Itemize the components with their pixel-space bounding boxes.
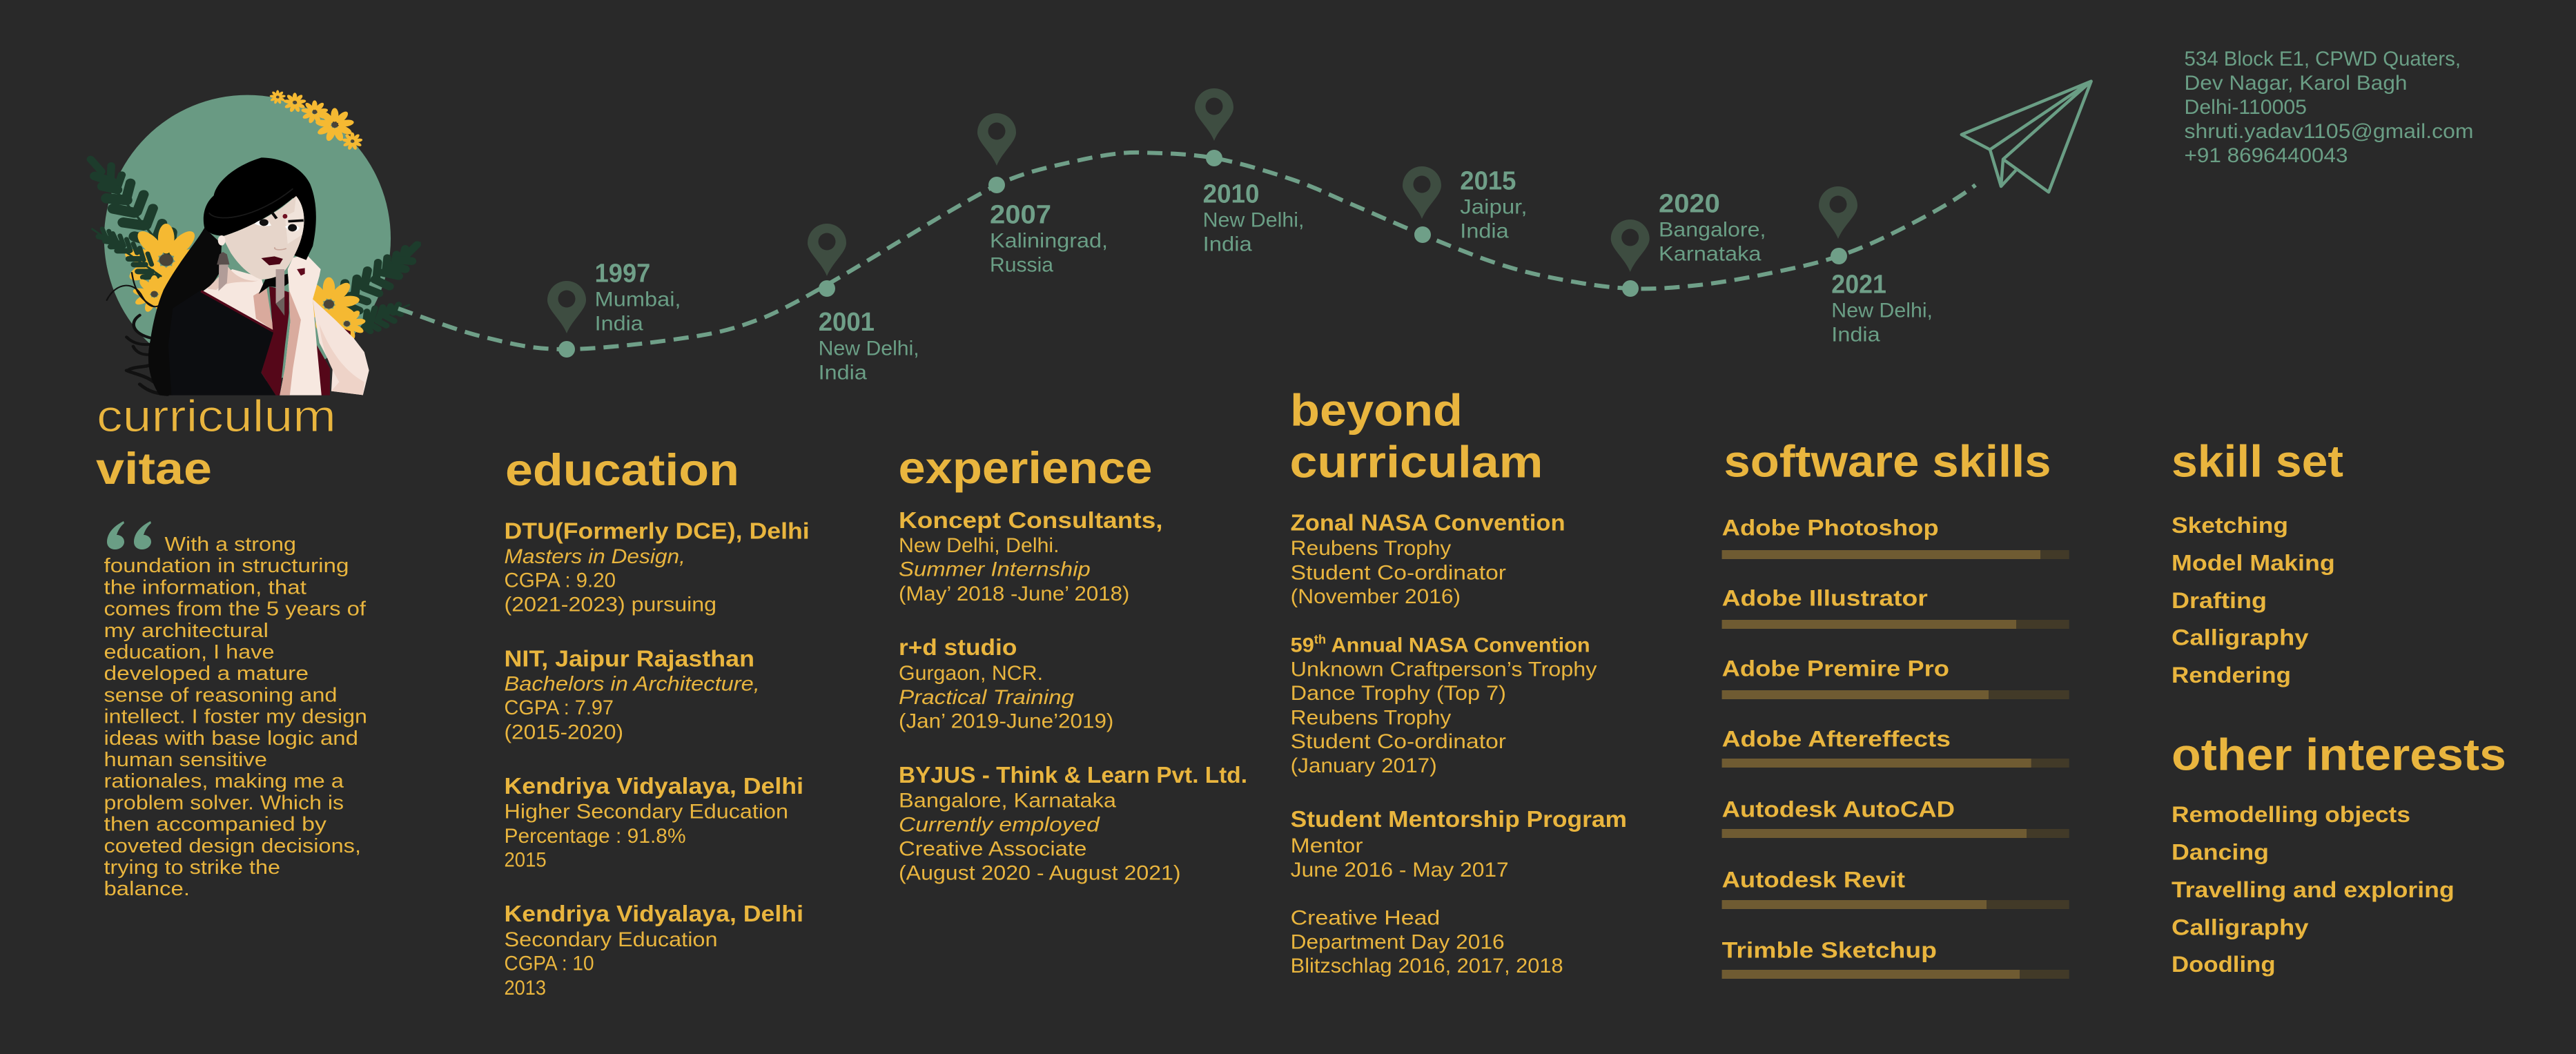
timeline stop 1997: 1997 — [595, 259, 650, 288]
entry: 59th Annual NASA Convention: Annual NASA Convention — [1326, 634, 1590, 656]
contact details: 534 Block E1, CPWD Quaters, — [2184, 48, 2461, 70]
timeline stop 2010: New Delhi, — [1203, 208, 1305, 231]
timeline stop 2001: 2001 — [819, 308, 875, 337]
entry: Zonal NASA Convention — [1291, 509, 1565, 608]
entry: Zonal NASA Convention: Reubens Trophy — [1291, 537, 1452, 560]
title: vitae — [96, 443, 212, 494]
contact details: Dev Nagar, Karol Bagh — [2184, 72, 2408, 95]
contact details: Delhi-110005 — [2184, 96, 2307, 119]
face highlight — [285, 196, 304, 244]
skill: Trimble Sketchup — [1722, 938, 2069, 979]
timeline stop 2021: New Delhi, — [1831, 299, 1933, 322]
entry: Kendriya Vidyalaya secondary — [504, 901, 803, 999]
entry: Student Mentorship Program: Student Mentorship Program — [1291, 806, 1627, 832]
long hair — [148, 228, 222, 396]
entry: 59th Annual NASA Convention: Unknown Craftperson’s Trophy — [1291, 658, 1597, 681]
skill list: Drafting — [2172, 588, 2267, 613]
profile statement: developed a mature — [104, 663, 309, 685]
profile statement: comes from the 5 years of — [104, 598, 367, 621]
profile statement: With a strong — [164, 534, 296, 556]
eyes — [255, 219, 300, 231]
entry: NIT — [504, 646, 760, 744]
entry: r+d studio: r+d studio — [899, 634, 1017, 660]
timeline stop 2020: Bangalore, — [1659, 218, 1766, 241]
timeline stop 2001 — [808, 224, 919, 384]
entry: DTU: Masters in Design, — [504, 545, 685, 568]
entry: BYJUS: (August 2020 - August 2021) — [899, 862, 1181, 885]
entry: Kendriya Vidyalaya higher secondary — [504, 773, 803, 871]
contact details: +91 8696440043 — [2184, 144, 2348, 167]
profile statement: trying to strike the — [104, 857, 280, 879]
entry: 59th Annual NASA Convention: (January 2017) — [1291, 754, 1437, 777]
entry: r+d studio: Practical Training — [899, 686, 1075, 709]
timeline stop 2015: Jaipur, — [1460, 195, 1527, 218]
heading: other interests: other interests — [2172, 730, 2506, 780]
skill list: Calligraphy — [2172, 625, 2309, 650]
heading: skill set: skill set — [2172, 436, 2343, 486]
hair top — [204, 157, 316, 260]
skill: Autodesk Revit — [1722, 868, 2069, 909]
neck shading — [207, 267, 259, 290]
entry: Zonal NASA Convention: Zonal NASA Convention — [1291, 509, 1565, 535]
entry: 59th Annual NASA Convention: 59 — [1291, 634, 1314, 656]
profile statement: education, I have — [104, 641, 275, 663]
entry: DTU: CGPA : 9.20 — [504, 569, 616, 592]
profile statement: problem solver. Which is — [104, 792, 344, 814]
entry: Koncept Consultants: New Delhi, Delhi. — [899, 534, 1060, 557]
panel: other interests — [2172, 730, 2506, 977]
right leaf branches — [343, 243, 420, 331]
entry: Kendriya Vidyalaya secondary: Secondary Education — [504, 928, 718, 951]
entry: BYJUS: Creative Associate — [899, 838, 1086, 860]
entry: Koncept Consultants: Summer Internship — [899, 558, 1091, 581]
hair curls — [107, 273, 168, 395]
skill: Autodesk Revit: Autodesk Revit — [1722, 868, 1905, 892]
timeline stop 2021: India — [1831, 323, 1880, 346]
entry: DTU: (2021-2023) pursuing — [504, 594, 716, 616]
profile statement — [104, 534, 367, 900]
entry: 59th Annual NASA Convention: Dance Trophy (Top 7) — [1291, 682, 1506, 705]
entry: Koncept Consultants — [899, 507, 1163, 605]
forearm shading — [280, 290, 301, 396]
heading: education: education — [505, 445, 739, 495]
timeline stop 2010 — [1195, 88, 1305, 255]
skill: Adobe Premire Pro: Adobe Premire Pro — [1722, 656, 1949, 681]
skill: Adobe Aftereffects: Adobe Aftereffects — [1722, 727, 1951, 752]
timeline stop 2015 — [1403, 166, 1527, 243]
entry: NIT: (2015-2020) — [504, 721, 623, 744]
entry: Creative Head: Creative Head — [1291, 906, 1440, 929]
entry: 59th Annual NASA Convention: th — [1314, 632, 1326, 646]
sari lower — [315, 328, 351, 396]
bindi — [283, 214, 287, 219]
entry: Koncept Consultants: (May’ 2018 -June’ 2018) — [899, 583, 1129, 605]
big left flower — [124, 224, 208, 297]
skill list — [2172, 513, 2335, 687]
skill: Adobe Aftereffects — [1722, 727, 2069, 768]
skill: Adobe Illustrator — [1722, 586, 2069, 629]
entry: DTU: DTU(Formerly DCE), Delhi — [504, 518, 810, 544]
timeline stop 2007 — [977, 113, 1108, 276]
panel: experience — [899, 442, 1247, 885]
entry: r+d studio — [899, 634, 1113, 733]
icon: paper plane — [1962, 81, 2091, 192]
timeline stop 1997 — [547, 259, 681, 358]
heading: beyond curriculam — [1289, 384, 1543, 487]
flower arc top right — [269, 90, 363, 150]
interests list: Dancing — [2172, 840, 2269, 865]
timeline stop 2007: Kaliningrad, — [990, 229, 1108, 252]
timeline stop 2020: Karnataka — [1659, 242, 1762, 265]
eyebrows — [272, 212, 304, 222]
skill list: Rendering — [2172, 663, 2291, 687]
entry: r+d studio: (Jan’ 2019-June’2019) — [899, 710, 1113, 733]
entry: BYJUS: Currently employed — [899, 813, 1101, 836]
right earring — [276, 269, 284, 315]
skill list: Model Making — [2172, 551, 2335, 576]
interests list: Remodelling objects — [2172, 802, 2410, 827]
contact details — [2184, 48, 2474, 167]
entry: BYJUS: BYJUS - Think & Learn Pvt. Ltd. — [899, 762, 1247, 788]
profile statement: human sensitive — [104, 749, 267, 771]
skill: Adobe Photoshop — [1722, 515, 2069, 559]
timeline stop 2021 — [1819, 186, 1933, 346]
entry: DTU — [504, 518, 810, 616]
entry: Zonal NASA Convention: (November 2016) — [1291, 585, 1461, 608]
entry: NIT: NIT, Jaipur Rajasthan — [504, 646, 754, 671]
entry: Kendriya Vidyalaya secondary: 2013 — [504, 977, 546, 999]
entry: Kendriya Vidyalaya higher secondary: Kendriya Vidyalaya, Delhi — [504, 773, 803, 799]
timeline stop 1997: Mumbai, — [595, 288, 681, 311]
interests list: Doodling — [2172, 952, 2276, 977]
timeline stop 2021: 2021 — [1831, 270, 1886, 299]
entry: BYJUS: Bangalore, Karnataka — [899, 790, 1117, 812]
timeline stop 2010: 2010 — [1203, 179, 1259, 208]
title — [96, 391, 336, 494]
title: curriculum — [97, 391, 336, 441]
interests list: Travelling and exploring — [2172, 877, 2455, 902]
nail — [297, 268, 305, 275]
profile statement: my architectural — [104, 620, 269, 642]
nose — [275, 247, 286, 250]
contact details: shruti.yadav1105@gmail.com — [2184, 120, 2474, 143]
panel: skill set — [2172, 436, 2343, 687]
dashed timeline path — [398, 153, 1975, 349]
skill: Autodesk AutoCAD — [1722, 797, 2069, 838]
sari drape — [262, 286, 289, 396]
entry: Kendriya Vidyalaya higher secondary: Percentage : 91.8% — [504, 825, 686, 848]
entry: Koncept Consultants: Koncept Consultants, — [899, 507, 1163, 533]
entry: Creative Head — [1291, 906, 1563, 977]
timeline stop 1997: India — [595, 312, 643, 335]
skill: Adobe Premire Pro — [1722, 656, 2069, 699]
timeline stop 2015: India — [1460, 219, 1509, 242]
small left flower — [133, 275, 176, 313]
profile statement: rationales, making me a — [104, 770, 344, 792]
skill: Trimble Sketchup: Trimble Sketchup — [1722, 938, 1937, 963]
entry: Kendriya Vidyalaya secondary: CGPA : 10 — [504, 953, 594, 975]
profile statement: the information, that — [104, 576, 306, 598]
interests list — [2172, 802, 2455, 977]
green circle — [104, 95, 391, 382]
interests list: Calligraphy — [2172, 915, 2309, 939]
skill: Adobe Illustrator: Adobe Illustrator — [1722, 586, 1928, 611]
entry: 59th Annual NASA Convention — [1291, 632, 1597, 777]
timeline stop 2020: 2020 — [1659, 189, 1720, 218]
entry: Student Mentorship Program — [1291, 806, 1627, 881]
entry: Creative Head: Department Day 2016 — [1291, 930, 1505, 954]
front forearm and hand — [280, 254, 322, 396]
entry: Kendriya Vidyalaya higher secondary: 2015 — [504, 848, 547, 871]
panel: beyond curriculam — [1289, 384, 1627, 977]
timeline stop 2010: India — [1203, 233, 1252, 255]
entry: Kendriya Vidyalaya secondary: Kendriya Vidyalaya, Delhi — [504, 901, 803, 926]
lips — [262, 256, 283, 265]
profile statement: foundation in structuring — [104, 555, 349, 577]
entry: Creative Head: Blitzschlag 2016, 2017, 2018 — [1291, 955, 1563, 977]
profile statement: coveted design decisions, — [104, 835, 361, 857]
profile statement: balance. — [104, 878, 190, 900]
heading: experience: experience — [899, 442, 1153, 493]
timeline stop 2001: India — [819, 361, 867, 384]
timeline stop 2007: 2007 — [990, 200, 1051, 229]
back forearm — [313, 299, 369, 395]
face — [222, 196, 304, 280]
left earring — [217, 252, 230, 291]
timeline stop 2001: New Delhi, — [819, 337, 919, 360]
panel: software skills — [1722, 436, 2069, 979]
entry: Student Mentorship Program: Mentor — [1291, 835, 1363, 857]
entry: NIT: Bachelors in Architecture, — [504, 673, 760, 696]
skill: Adobe Photoshop: Adobe Photoshop — [1722, 515, 1939, 540]
blouse — [168, 291, 276, 396]
panel: education — [504, 445, 810, 999]
entry: Student Mentorship Program: June 2016 - May 2017 — [1291, 859, 1509, 881]
heading: beyond curriculam: beyond — [1290, 384, 1463, 435]
profile statement: then accompanied by — [104, 814, 327, 836]
timeline stop 2007: Russia — [990, 253, 1053, 276]
icon: quote marks — [107, 521, 151, 549]
neckline trim — [201, 291, 273, 331]
timeline stop 2015: 2015 — [1460, 166, 1516, 195]
portrait illustration — [90, 90, 420, 396]
back forearm shading — [320, 324, 364, 395]
entry: Zonal NASA Convention: Student Co-ordinator — [1291, 561, 1506, 584]
profile statement: intellect. I foster my design — [104, 706, 367, 728]
heading: beyond curriculam: curriculam — [1289, 436, 1543, 487]
entry: 59th Annual NASA Convention: Student Co-ordinator — [1291, 730, 1506, 753]
entry: NIT: CGPA : 7.97 — [504, 696, 614, 719]
timeline stop 2020 — [1611, 189, 1766, 297]
lower-left leaf branch — [92, 228, 161, 277]
entry: 59th Annual NASA Convention: Reubens Trophy — [1291, 706, 1452, 729]
neck shadow — [253, 288, 273, 330]
hair strand — [209, 188, 293, 218]
profile statement: sense of reasoning and — [104, 684, 337, 706]
right flowers — [297, 277, 366, 340]
chest and neck — [203, 269, 275, 331]
entry: r+d studio: Gurgaon, NCR. — [899, 662, 1043, 685]
entry: BYJUS — [899, 762, 1247, 885]
profile statement: ideas with base logic and — [104, 728, 358, 750]
entry: Kendriya Vidyalaya higher secondary: Higher Secondary Education — [504, 801, 788, 823]
black hair under chin — [259, 274, 289, 294]
skill: Autodesk AutoCAD: Autodesk AutoCAD — [1722, 797, 1955, 822]
heading: software skills: software skills — [1724, 436, 2051, 486]
ear — [218, 235, 225, 246]
upper-left leaf branch — [90, 159, 171, 251]
skill list: Sketching — [2172, 513, 2288, 538]
